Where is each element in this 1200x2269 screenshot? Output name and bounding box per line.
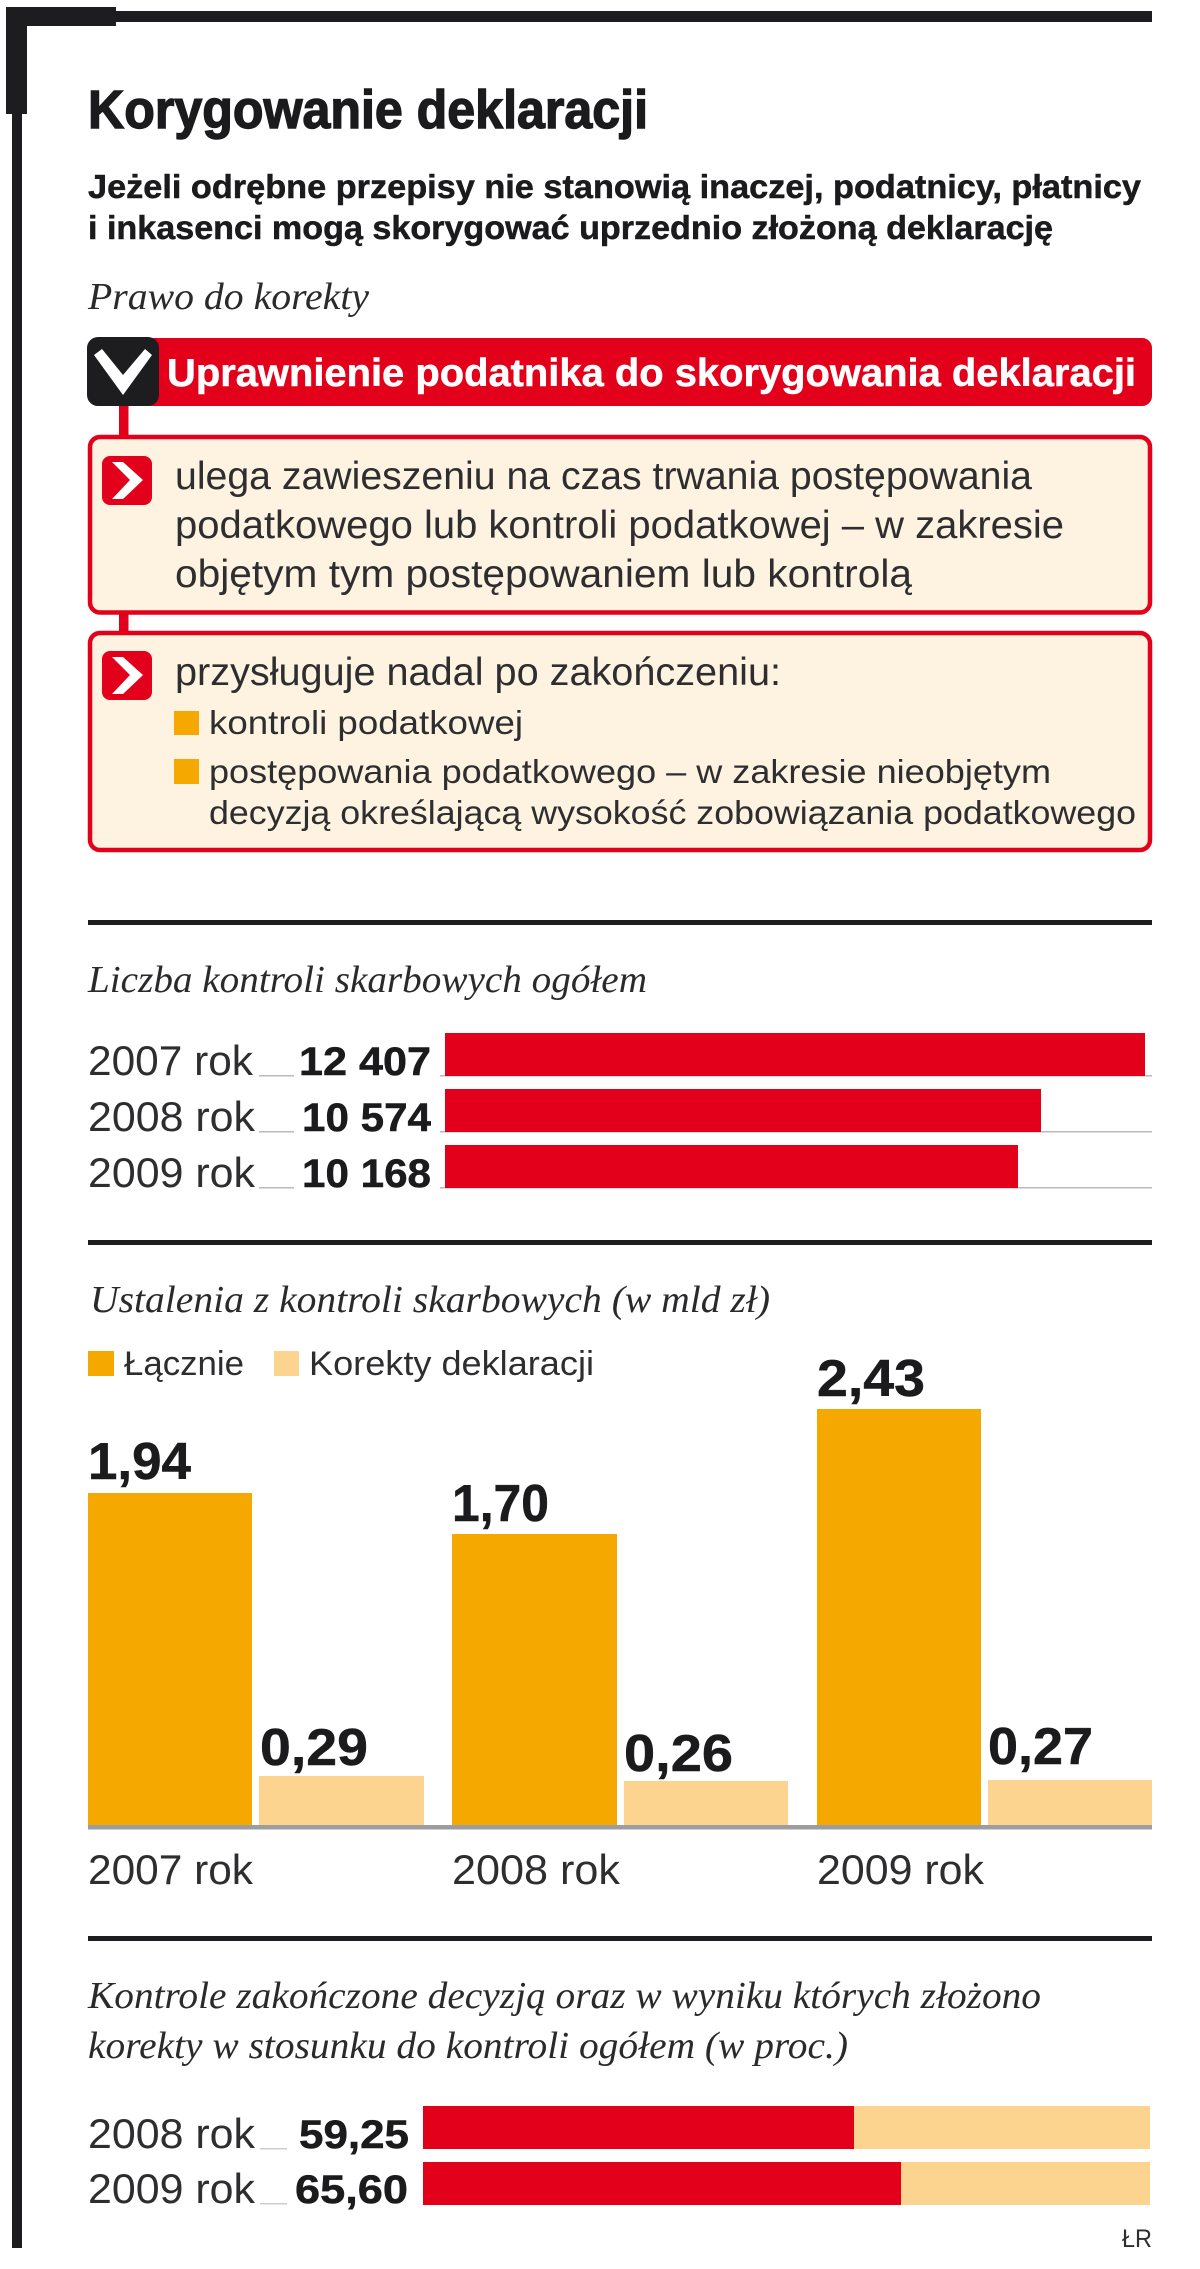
subtitle: Jeżeli odrębne przepisy nie stanowią inaczej, podatnicy, płatnicy <box>88 168 1142 205</box>
row 2008 <box>88 1089 1152 1140</box>
chart heading: korekty w stosunku do kontroli ogółem (w proc.) <box>88 2025 848 2067</box>
legend: Łącznie <box>124 1345 244 1383</box>
box text: objętym tym postępowaniem lub kontrolą <box>175 553 912 596</box>
group 2009 <box>817 1350 1152 1893</box>
chart heading: Liczba kontroli skarbowych ogółem <box>87 959 647 1001</box>
header bar <box>88 338 1152 406</box>
author credit: ŁR <box>1122 2225 1152 2253</box>
section heading: prawo do korekty: Prawo do korekty <box>87 276 369 318</box>
group 2007: 2007 rok <box>88 1846 254 1893</box>
group 2009: 2,43 <box>817 1350 925 1408</box>
row 2008: 10 574 <box>302 1096 432 1140</box>
box text: postępowania podatkowego – w zakresie nieobjętym <box>209 753 1051 790</box>
row 2007: 12 407 <box>299 1040 431 1084</box>
box text <box>174 651 1136 831</box>
chart: ustalenia <box>88 1279 1152 1893</box>
row 2008: 2008 rok <box>88 2110 256 2157</box>
row 2007: 2007 rok <box>88 1037 254 1084</box>
chart heading: Ustalenia z kontroli skarbowych (w mld zł) <box>90 1279 770 1321</box>
panel: uprawnienie <box>87 337 1152 850</box>
box text <box>175 455 1064 596</box>
box: suspended right <box>90 437 1150 612</box>
icon: right chevron <box>102 456 152 505</box>
title: Korygowanie deklaracji <box>88 80 648 140</box>
box text: przysługuje nadal po zakończeniu: <box>175 651 781 694</box>
group 2008: 1,70 <box>452 1475 549 1533</box>
row 2009: 2009 rok <box>88 1149 256 1196</box>
row 2009: 65,60 <box>295 2168 408 2212</box>
subtitle: i inkasenci mogą skorygować uprzednio złożoną deklarację <box>88 209 1053 246</box>
chart: kontrole zakończone <box>87 1975 1150 2212</box>
axis <box>88 1825 1152 1830</box>
group 2007: 0,29 <box>260 1719 368 1777</box>
row 2009 <box>88 1145 1152 1196</box>
box text: kontroli podatkowej <box>209 704 523 741</box>
box: right retained <box>90 633 1150 850</box>
row 2007 <box>88 1033 1152 1084</box>
row 2008 <box>88 2106 1150 2157</box>
icon: down chevron <box>87 337 159 406</box>
row 2009: 2009 rok <box>88 2165 256 2212</box>
header bar: Uprawnienie podatnika do skorygowania deklaracji <box>167 352 1136 395</box>
group 2007: 1,94 <box>88 1433 191 1491</box>
connectors <box>119 406 128 632</box>
subtitle <box>88 168 1142 246</box>
box text: decyzją określającą wysokość zobowiązania podatkowego <box>209 794 1136 831</box>
group 2009: 0,27 <box>988 1718 1093 1776</box>
chart: liczba kontroli <box>87 959 1152 1196</box>
legend: Korekty deklaracji <box>309 1345 594 1383</box>
chart heading: Kontrole zakończone decyzją oraz w wyniku których złożono <box>87 1975 1041 2017</box>
chart heading <box>87 1975 1041 2067</box>
box text: ulega zawieszeniu na czas trwania postępowania <box>175 455 1032 498</box>
group 2007 <box>88 1433 424 1893</box>
row 2008: 2008 rok <box>88 1093 256 1140</box>
group 2008: 0,26 <box>624 1725 733 1783</box>
icon: right chevron <box>102 651 152 700</box>
row 2008: 59,25 <box>299 2113 409 2157</box>
group 2009: 2009 rok <box>817 1846 985 1893</box>
row 2009: 10 168 <box>302 1152 431 1196</box>
box text: podatkowego lub kontroli podatkowej – w zakresie <box>175 504 1064 547</box>
group 2008: 2008 rok <box>452 1846 621 1893</box>
group 2008 <box>452 1475 788 1893</box>
legend <box>88 1345 594 1383</box>
row 2009 <box>88 2162 1150 2212</box>
